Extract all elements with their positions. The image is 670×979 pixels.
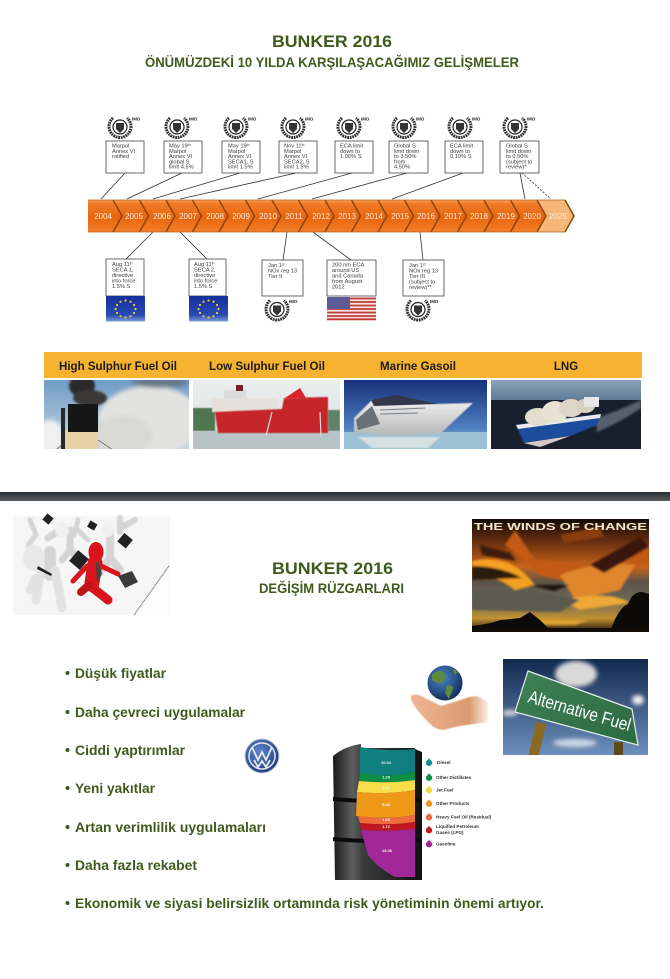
timeline arrow bar: 2020 [523,212,541,221]
bullet list: changes: Yeni yakıtlar [75,781,156,796]
callout: May 19 global S limit: limit 4.5% [169,165,194,171]
callout: 200 nm ECA with US flag: from August [332,279,363,285]
callout: Global S 0.50%: Global S [506,144,528,150]
timeline arrow bar: 2013 [338,212,356,221]
icon: IMO logo 6: IMO [416,116,425,122]
photo: alternative fuel road sign [502,659,648,758]
callout: Aug 11 SECA 1 with EU flag: SECA 1, [112,268,134,274]
callout: Jan 1 NOx Tier II with IMO logo: st [282,262,285,266]
icon: IMO logo 3: IMO [248,116,257,122]
callout: Aug 11 SECA 2 with EU flag: SECA 2, [194,268,216,274]
barrel fuel layers: 1.68 [382,817,391,822]
timeline arrow bar: 2007 [179,212,197,221]
photo: ship funnel with black smoke [44,380,189,449]
callout: Global S 3.50%: limit down [394,149,419,155]
callout: Nov 11 SECA2: Nov 11 [284,144,302,150]
barrel body [333,744,422,880]
callout: May 19 SECA1: May 19 [228,144,247,150]
timeline arrow bar: 2018 [470,212,488,221]
timeline arrow bar: 2015 [391,212,409,221]
barrel legend: Heavy Fuel Oil (Residual) [436,814,492,820]
timeline arrow bar: 2016 [417,212,435,221]
photo: red tanker [193,380,340,449]
callout: ECA limit 0.10%: down to [450,149,470,155]
title: Bunker 2016 second: BUNKER 2016 [272,559,393,578]
callout: ECA limit 0.10%: ECA limit [450,144,473,150]
callout: Global S 3.50%: to 3.50% [394,154,416,160]
callout: 200 nm ECA with US flag: around US [332,268,359,274]
subtitle: winds of change: DEĞİŞİM RÜZGARLARI [259,581,404,596]
callout: Aug 11 SECA 2 with EU flag [189,259,228,322]
callout: Aug 11 SECA 1 with EU flag: into force [112,278,135,284]
callout: Global S 3.50%: 4.50% [394,165,410,171]
photo: red figure leading white runners [13,513,170,615]
callout: Aug 11 SECA 2 with EU flag: 1.5% S [194,284,213,290]
photo: LNG carrier [491,380,641,449]
timeline arrow bar: 2014 [365,212,383,221]
icon: IMO logo 2 [166,116,198,137]
barrel legend: Jet Fuel [436,788,453,792]
callout: Marpol Annex VI ratified [106,141,144,173]
barrel fuel layers: 15.36 [382,848,393,853]
icon: IMO logo 3 [225,116,257,137]
fuel header band: High Sulphur Fuel Oil [59,361,177,373]
photo: alternative fuel road sign: Alternative Fuel [526,687,633,735]
callout: Jan 1 NOx Tier III with IMO logo: IMO [430,299,439,304]
callout: May 19 SECA1: th [247,143,250,147]
callout: Aug 11 SECA 1 with EU flag: th [130,262,133,266]
photo: cruise ship [344,380,487,449]
timeline arrow bar: 2010 [259,212,277,221]
callout: Nov 11 SECA2: SECA2, S [284,159,310,165]
callout: Aug 11 SECA 2 with EU flag: th [212,262,215,266]
title: Bunker 2016: BUNKER 2016 [272,32,392,51]
icon: IMO logo 6 [393,116,425,137]
callout: Aug 11 SECA 1 with EU flag: 1.5% S [112,284,131,290]
barrel fuel layers: 5.48 [382,802,391,807]
icon: IMO logo 2: IMO [189,116,198,122]
callout: Jan 1 NOx Tier III with IMO logo: (subject to [409,280,435,286]
callout: 200 nm ECA with US flag: 2012 [332,284,345,290]
callout: Jan 1 NOx Tier III with IMO logo: st [423,262,426,266]
barrel legend: Diesel [437,760,451,765]
callout: Global S 0.50%: limit down [506,149,531,155]
bullet list: changes: Daha çevreci uygulamalar [75,705,246,720]
icon: IMO logo 8: IMO [527,116,536,122]
callout: Aug 11 SECA 1 with EU flag [106,259,145,322]
callout: ECA limit 0.10%: 0.10% S [450,154,472,160]
callout: Nov 11 SECA2: th [302,143,305,147]
panel: regulation timeline [88,116,574,322]
connector lines to timeline [101,173,551,260]
callout: Nov 11 SECA2: Annex VI [284,154,308,160]
icon: IMO logo 5 [338,116,370,137]
callout: May 19 global S limit: Marpol [169,149,186,155]
callout: Jan 1 NOx Tier III with IMO logo: Tier III [409,274,425,280]
callout: Jan 1 NOx Tier III with IMO logo: Jan 1 [409,263,423,269]
barrel legend: Gases (LPG) [436,830,464,835]
callout: Marpol Annex VI ratified: Marpol [112,144,129,150]
callout: Nov 11 SECA2 [279,141,317,173]
timeline arrow bar: 2006 [153,212,171,221]
red figure [73,542,138,600]
callout: Jan 1 NOx Tier III with IMO logo: review)** [409,285,433,291]
callout: 200 nm ECA with US flag: and Canada [332,274,364,280]
photo: the winds of change [472,519,649,632]
callout: Jan 1 NOx Tier II with IMO logo: Jan 1 [268,263,282,269]
timeline arrow bar: 2019 [497,212,515,221]
bullet list: changes: Daha fazla rekabet [75,858,198,873]
icon: IMO logo 1: IMO [132,116,141,122]
timeline arrow bar [88,200,574,232]
timeline arrow bar: 2017 [444,212,462,221]
callout: Marpol Annex VI ratified: Annex VI [112,149,136,155]
fuel header band: Marine Gasoil [380,361,456,373]
callout: Jan 1 NOx Tier III with IMO logo: NOx reg 13 [409,268,438,274]
bullet list: changes: Ciddi yaptırımlar [75,743,186,758]
callout: Global S 0.50%: (subject to [506,159,532,165]
fuel header band [44,352,642,378]
timeline arrow bar: 2004 [94,212,112,221]
barrel fuel layers: 2.01 [382,785,391,790]
fuel header band: Low Sulphur Fuel Oil [209,361,325,373]
icon: IMO logo 7: IMO [472,116,481,122]
timeline arrow bar: 2012 [312,212,330,221]
callout: 200 nm ECA with US flag: 200 nm ECA [332,262,364,268]
callout: Global S 0.50% [500,141,539,173]
callout: May 19 SECA1: limit 1.5% [228,165,253,171]
callout: Aug 11 SECA 2 with EU flag: directive [194,273,215,279]
callout: Jan 1 NOx Tier III with IMO logo [403,260,444,320]
barrel legend: Gasoline [436,842,456,846]
callout: Marpol Annex VI ratified: ratified [112,154,129,160]
callout: May 19 SECA1: SECA1, S [228,159,254,165]
callout: Aug 11 SECA 1 with EU flag: directive [112,273,133,279]
callout: 200 nm ECA with US flag [327,260,376,320]
timeline arrow bar: 2005 [125,212,143,221]
callout: Global S 3.50% [389,141,428,173]
barrel fuel layers: 10.04 [381,760,392,765]
timeline arrow bar: 2008 [206,212,224,221]
callout: May 19 SECA1: Annex VI [228,154,252,160]
callout: Jan 1 NOx Tier II with IMO logo: IMO [289,299,298,304]
timeline arrow bar: 2025 [549,212,567,221]
icon: IMO logo 4: IMO [305,116,314,122]
callout: May 19 global S limit: global S [169,159,190,165]
barrel legend [426,758,492,847]
icon: IMO logo 4 [282,116,314,137]
callout: Jan 1 NOx Tier II with IMO logo: NOx reg 13 [268,268,297,274]
callout: Global S 3.50%: Global S [394,144,416,150]
callout: May 19 global S limit: May 19 [169,144,188,150]
photo: the winds of change: THE WINDS OF CHANGE [474,521,647,533]
icon: VW logo [245,739,279,773]
barrel legend: Other Distillates [436,775,472,780]
fuel header band: LNG [554,361,578,373]
callout: Global S 0.50%: to 0.50% [506,154,528,160]
callout: May 19 global S limit: th [188,143,191,147]
callout: ECA limit 0.10% [445,141,483,173]
callout: Aug 11 SECA 2 with EU flag: Aug 11 [194,262,212,268]
callout: Aug 11 SECA 1 with EU flag: Aug 11 [112,262,130,268]
callout: ECA limit 1.00%: ECA limit [340,144,363,150]
callout: Global S 3.50%: from [394,159,406,165]
bullet list: changes: Düşük fiyatlar [75,666,167,681]
timeline arrow bar: 2009 [232,212,250,221]
barrel fuel layers: 1.72 [382,824,391,829]
icon: IMO logo 5: IMO [361,116,370,122]
timeline arrow bar: 2011 [285,212,303,221]
bullet list: changes [66,666,544,911]
icon: IMO logo 7 [449,116,481,137]
callout: ECA limit 1.00% [335,141,373,173]
callout: Nov 11 SECA2: limit 1.5% [284,165,309,171]
barrel legend: Liquified Petroleum [436,824,479,829]
callout: May 19 SECA1: Marpol [228,149,245,155]
callout: May 19 global S limit: Annex VI [169,154,193,160]
panel: fuel types [36,352,642,456]
callout: Global S 0.50%: review)* [506,165,527,171]
barrel legend: Other Products [436,801,470,806]
callout: ECA limit 1.00%: down to [340,149,360,155]
callout: ECA limit 1.00%: 1.00% S [340,154,362,160]
divider bar [0,492,670,501]
icon: IMO logo 8 [504,116,536,137]
subtitle: next ten years developments: ÖNÜMÜZDEKİ 10 YILDA KARŞILAŞACAĞIMIZ GELİŞMELER [145,53,519,70]
barrel fuel layers: 1.29 [382,774,391,780]
callout: May 19 SECA1 [222,141,260,173]
callout: May 19 global S limit [164,141,202,173]
icon: globe on open hand [411,666,488,730]
icon: IMO logo 1 [109,116,141,137]
barrel fuel layers [356,747,415,877]
bullet list: changes: Ekonomik ve siyasi belirsizlik ortamında risk yönetiminin önemi artıyor. [75,896,544,911]
callout: Jan 1 NOx Tier II with IMO logo: Tier II [268,274,283,280]
callout: Nov 11 SECA2: Marpol [284,149,301,155]
callout: Aug 11 SECA 2 with EU flag: into force [194,278,217,284]
callout: Jan 1 NOx Tier II with IMO logo [262,260,303,320]
bullet list: changes: Artan verimlilik uygulamaları [75,820,266,835]
chart: fuel barrel [333,744,492,880]
